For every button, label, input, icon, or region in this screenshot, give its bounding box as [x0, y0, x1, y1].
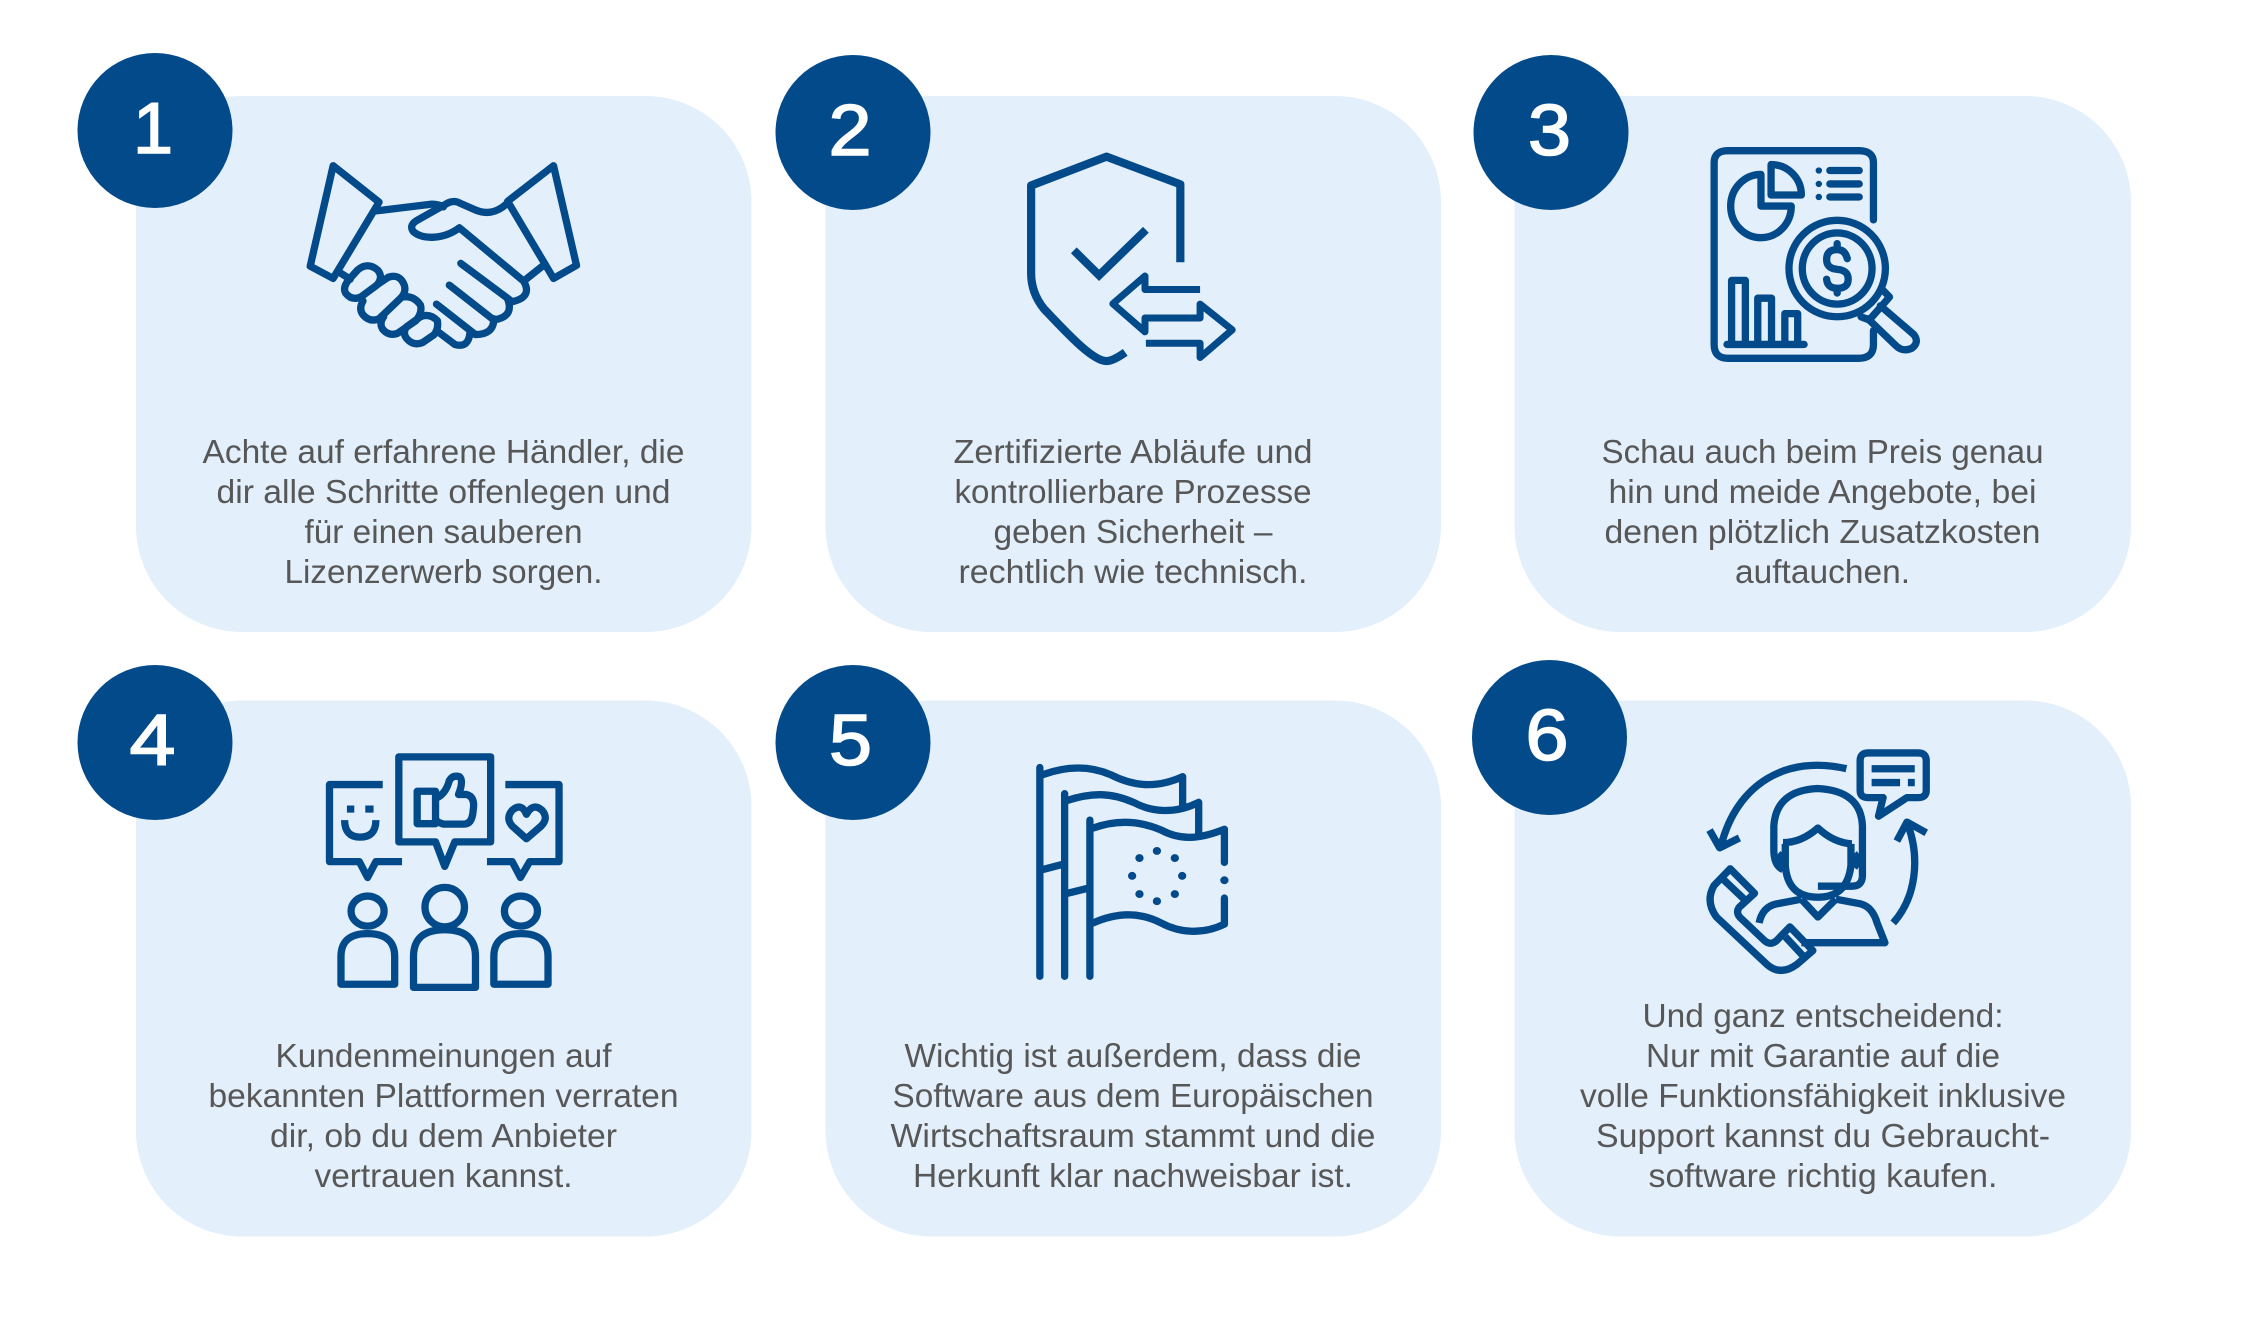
panel: step 3 check the price: [1474, 55, 2131, 632]
card background 3: [1514, 96, 2131, 632]
text block 2: Zertifizierte Abläufe und: [954, 434, 1312, 471]
number badge 3: [1474, 55, 1628, 210]
text block 3: denen plötzlich Zusatzkosten: [1604, 514, 2040, 551]
text block 1: [202, 434, 684, 591]
text block 6: volle Funktionsfähigkeit inklusive: [1580, 1078, 2066, 1115]
icon: support agent with phone: [1710, 753, 1926, 970]
panel: step 4 customer reviews: [78, 665, 752, 1236]
number badge 2: 2: [828, 91, 872, 171]
text block 4: [208, 1038, 678, 1195]
text block 2: [954, 434, 1312, 591]
text block 2: kontrollierbare Prozesse: [954, 474, 1312, 511]
text block 1: für einen sauberen: [304, 514, 582, 551]
text block 5: Wirtschaftsraum stammt und die: [890, 1118, 1376, 1155]
number badge 6: [1472, 660, 1627, 815]
number badge 1: [78, 53, 232, 208]
number badge 1: 1: [133, 89, 173, 169]
icon: EU flags: [1040, 768, 1229, 976]
text block 5: Software aus dem Europäischen: [892, 1078, 1374, 1115]
text block 6: software richtig kaufen.: [1648, 1158, 1998, 1195]
text block 6: Und ganz entscheidend:: [1642, 998, 2004, 1035]
text block 6: Nur mit Garantie auf die: [1646, 1038, 2000, 1075]
icon: report with magnifier and dollar: [1714, 151, 1916, 358]
number badge 4: [78, 665, 232, 820]
card background 4: [136, 700, 752, 1236]
card background 2: [826, 96, 1441, 632]
icon: shield with checkmark and arrows: [1031, 157, 1232, 361]
card background 5: [826, 700, 1441, 1236]
text block 4: Kundenmeinungen auf: [276, 1038, 612, 1075]
number badge 3: 3: [1528, 91, 1571, 171]
text block 3: Schau auch beim Preis genau: [1602, 434, 2044, 471]
number badge 6: 6: [1526, 696, 1568, 776]
text block 4: dir, ob du dem Anbieter: [270, 1118, 617, 1155]
text block 1: Achte auf erfahrene Händler, die: [202, 434, 684, 471]
text block 6: Support kannst du Gebraucht-: [1596, 1118, 2050, 1155]
text block 3: auftauchen.: [1735, 554, 1910, 591]
text block 1: dir alle Schritte offenlegen und: [216, 474, 670, 511]
card background 1: [136, 96, 752, 632]
icon: handshake: [310, 166, 576, 345]
text block 4: bekannten Plattformen verraten: [208, 1078, 678, 1115]
text block 3: [1602, 434, 2044, 591]
number badge 5: [776, 665, 930, 820]
text block 6: [1580, 998, 2066, 1195]
text block 5: [890, 1038, 1376, 1195]
card background 6: [1514, 700, 2131, 1236]
icon: people with speech bubbles: [329, 757, 559, 987]
number badge 4: 4: [130, 701, 176, 781]
panel: step 5 European origin: [776, 665, 1441, 1236]
number badge 2: [776, 55, 930, 210]
panel: step 6 warranty and support: [1472, 660, 2131, 1236]
text block 5: Herkunft klar nachweisbar ist.: [913, 1158, 1353, 1195]
number badge 5: 5: [829, 701, 872, 781]
text block 1: Lizenzerwerb sorgen.: [284, 554, 602, 591]
panel: step 1 experienced dealers: [78, 53, 752, 632]
text block 3: hin und meide Angebote, bei: [1608, 474, 2036, 511]
text block 2: geben Sicherheit –: [994, 514, 1273, 551]
text block 4: vertrauen kannst.: [314, 1158, 572, 1195]
panel: step 2 certified processes: [776, 55, 1441, 632]
text block 5: Wichtig ist außerdem, dass die: [904, 1038, 1362, 1075]
text block 2: rechtlich wie technisch.: [958, 554, 1308, 591]
